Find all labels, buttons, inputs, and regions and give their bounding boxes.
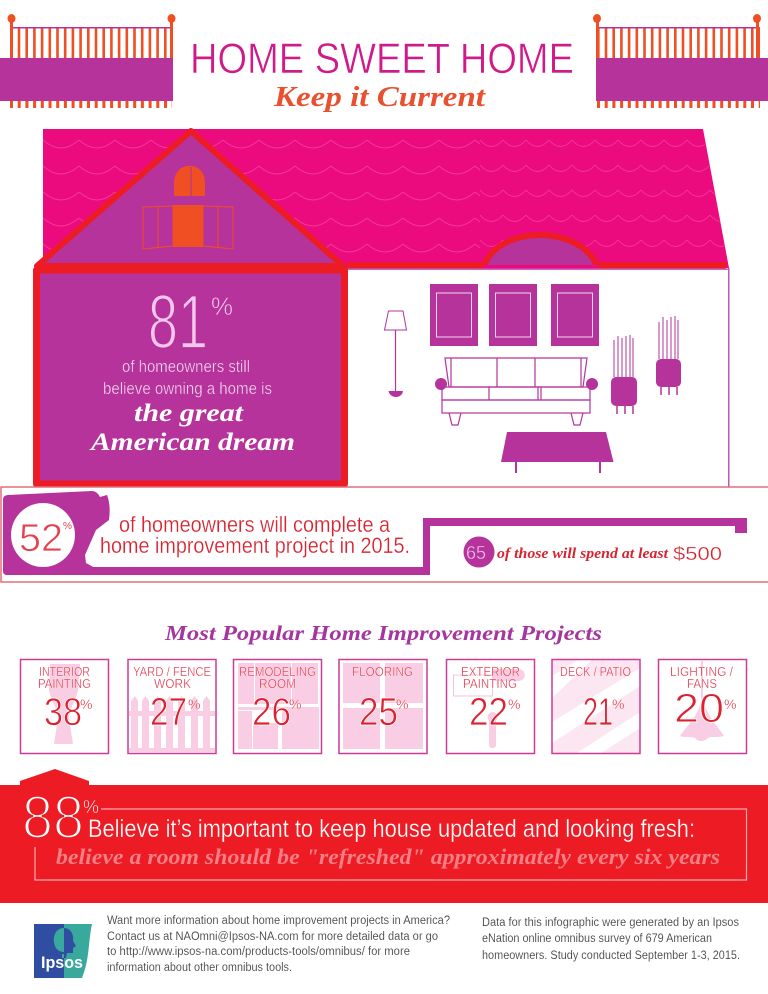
- card: yard fence work: YARD / FENCE: [133, 665, 211, 679]
- card: exterior painting: 22: [469, 691, 508, 734]
- title: HOME SWEET HOME: [190, 35, 574, 83]
- card: deck patio: 21: [583, 691, 613, 734]
- panel: 81 percent stat: [36, 270, 344, 484]
- card: flooring: %: [396, 696, 408, 712]
- icon: paint roller: [454, 669, 525, 748]
- icon: Ipsos logo: [34, 924, 92, 978]
- footer methodology text: [482, 917, 740, 962]
- 88 percent sign: %: [83, 797, 99, 817]
- footer contact text: to http://www.ipsos-na.com/products-tools/omnibus/ for more: [107, 946, 410, 958]
- card: yard fence work: 27: [150, 691, 187, 734]
- footer contact text: [107, 915, 450, 974]
- 81 highlight: [89, 400, 295, 456]
- plant right: [656, 316, 681, 395]
- picture frames: [430, 284, 599, 346]
- card: deck patio: %: [612, 696, 624, 712]
- card: interior painting: %: [80, 696, 92, 712]
- coffee table: [501, 432, 614, 473]
- banner outline: [35, 809, 746, 880]
- card: deck patio: [552, 660, 640, 754]
- footer methodology text: eNation online omnibus survey of 679 American: [482, 933, 712, 945]
- card: exterior painting: [446, 660, 534, 754]
- footer methodology text: Data for this infographic were generated by an Ipsos: [482, 917, 739, 929]
- card: interior painting: [20, 660, 108, 754]
- 52 percent sign: %: [63, 521, 72, 532]
- purple connector frame: [93, 518, 747, 575]
- card: lighting fans: %: [724, 696, 736, 712]
- 81 highlight: American dream: [89, 429, 295, 456]
- purple banner: [3, 491, 110, 575]
- floor lamp: [384, 311, 406, 397]
- plant left: [611, 335, 637, 414]
- left balcony fence: [0, 14, 176, 104]
- section heading: Most Popular Home Improvement Projects: [164, 621, 602, 645]
- house wall with furniture: [347, 268, 730, 487]
- 52 caption: home improvement project in 2015.: [100, 533, 410, 558]
- card: lighting fans: LIGHTING /: [670, 665, 733, 679]
- card: interior painting: 38: [44, 691, 82, 734]
- panel: 88 percent banner: [0, 769, 768, 903]
- icon: Ipsos logo: Ipsos: [41, 953, 83, 972]
- gable: [37, 131, 343, 266]
- 81 caption: believe owning a home is: [103, 380, 272, 398]
- 88 number: 88: [22, 784, 84, 851]
- card: flooring: [339, 660, 427, 754]
- card: flooring: 25: [359, 691, 398, 734]
- icon: dress form: [49, 664, 80, 744]
- 81 caption: of homeowners still: [122, 358, 250, 376]
- 65 caption: of those will spend at least: [497, 546, 669, 562]
- icon: deck boards: [552, 660, 640, 753]
- footer contact text: Contact us at NAOmni@Ipsos-NA.com for more detailed data or go: [107, 931, 438, 943]
- subtitle: Keep it Current: [273, 81, 486, 113]
- 65 number: 65: [466, 543, 486, 563]
- card: yard fence work: [128, 660, 216, 754]
- footer contact text: information about other omnibus tools.: [107, 962, 292, 974]
- 81 caption: [103, 358, 272, 398]
- card: lighting fans: 20: [674, 685, 724, 731]
- icon: room floor plan: [238, 663, 319, 749]
- icon: picket fence: [129, 696, 215, 753]
- footer contact text: Want more information about home improvement projects in America?: [107, 915, 450, 927]
- icon: floor tiles: [343, 663, 423, 749]
- footer methodology text: homeowners. Study conducted September 1-3, 2015.: [482, 950, 740, 962]
- 88 subline: believe a room should be "refreshed" approximately every six years: [56, 844, 720, 869]
- 81 percent sign: %: [211, 293, 233, 321]
- attic arched window: [174, 166, 205, 196]
- card: interior painting: PAINTING: [38, 677, 91, 691]
- card: interior painting: INTERIOR: [39, 665, 90, 679]
- roof dome: [483, 235, 598, 269]
- card: remodeling room: %: [289, 696, 301, 712]
- card: remodeling room: [234, 660, 322, 754]
- card: exterior painting: EXTERIOR: [461, 665, 520, 679]
- card: remodeling room: REMODELING: [239, 665, 316, 679]
- 52 caption: [100, 512, 410, 558]
- sofa: [435, 358, 598, 425]
- 52 caption: of homeowners will complete a: [119, 512, 391, 537]
- card: lighting fans: FANS: [687, 677, 717, 691]
- 52 circle: [11, 503, 75, 567]
- card: exterior painting: %: [508, 696, 520, 712]
- card: yard fence work: %: [188, 696, 200, 712]
- 81 highlight: the great: [134, 400, 244, 427]
- card: exterior painting: PAINTING: [463, 677, 517, 691]
- card: remodeling room: ROOM: [259, 677, 296, 691]
- house roof: [43, 129, 729, 269]
- 500 dollars: $500: [673, 544, 722, 564]
- panel: 52 percent band: [1, 487, 768, 582]
- card: deck patio: DECK / PATIO: [560, 665, 631, 679]
- banner roof peak: [20, 769, 89, 785]
- card: remodeling room: 26: [252, 691, 291, 734]
- 81 number: 81: [148, 280, 208, 365]
- attic balcony window: [143, 205, 233, 249]
- card: lighting fans: [658, 660, 746, 754]
- 88 headline: Believe it’s important to keep house updated and looking fresh:: [88, 815, 695, 843]
- card: flooring: FLOORING: [352, 665, 413, 679]
- card: yard fence work: WORK: [154, 677, 192, 691]
- 65 circle: [464, 536, 494, 568]
- icon: hanging lamp: [680, 660, 724, 741]
- 52 number: 52: [19, 517, 63, 560]
- right balcony fence: [593, 14, 768, 104]
